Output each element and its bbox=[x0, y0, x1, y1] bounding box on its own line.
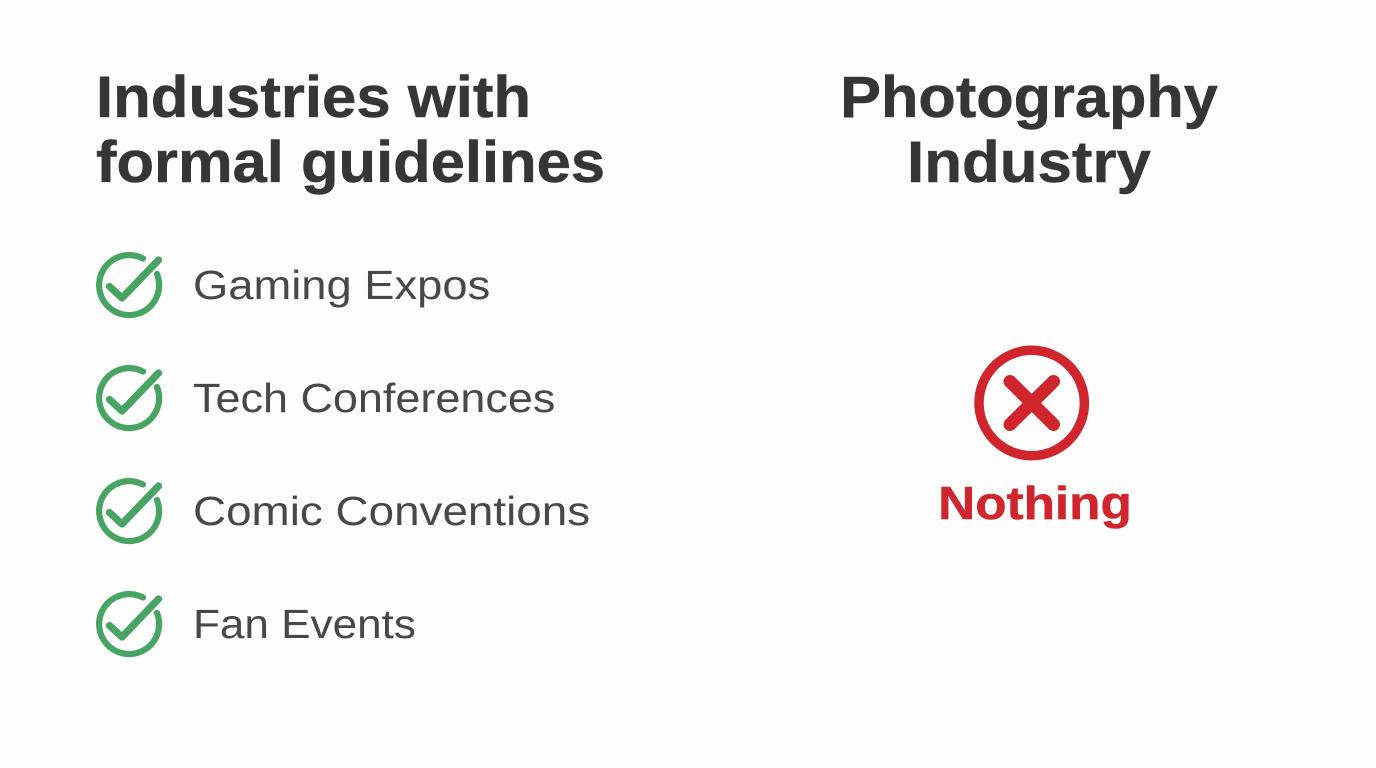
label: nothing: Nothing bbox=[938, 477, 1131, 529]
heading: industries with formal guidelines: formal guidelines bbox=[96, 130, 605, 195]
list item: comic conventions bbox=[96, 478, 590, 544]
list item: gaming expos: Gaming Expos bbox=[193, 262, 490, 308]
heading: industries with formal guidelines bbox=[96, 65, 605, 195]
heading: photography industry: Industry bbox=[907, 130, 1151, 195]
list item: fan events bbox=[96, 591, 416, 658]
heading: photography industry: Photography bbox=[840, 65, 1218, 130]
list item: tech conferences: Tech Conferences bbox=[193, 374, 555, 420]
heading: photography industry bbox=[840, 65, 1218, 195]
list item: gaming expos bbox=[96, 252, 490, 318]
icon: red x in circle bbox=[974, 346, 1090, 460]
list item: tech conferences bbox=[96, 365, 555, 432]
list item: fan events: Fan Events bbox=[193, 600, 416, 646]
heading: industries with formal guidelines: Industries with bbox=[96, 65, 531, 130]
list item: comic conventions: Comic Conventions bbox=[193, 488, 590, 534]
